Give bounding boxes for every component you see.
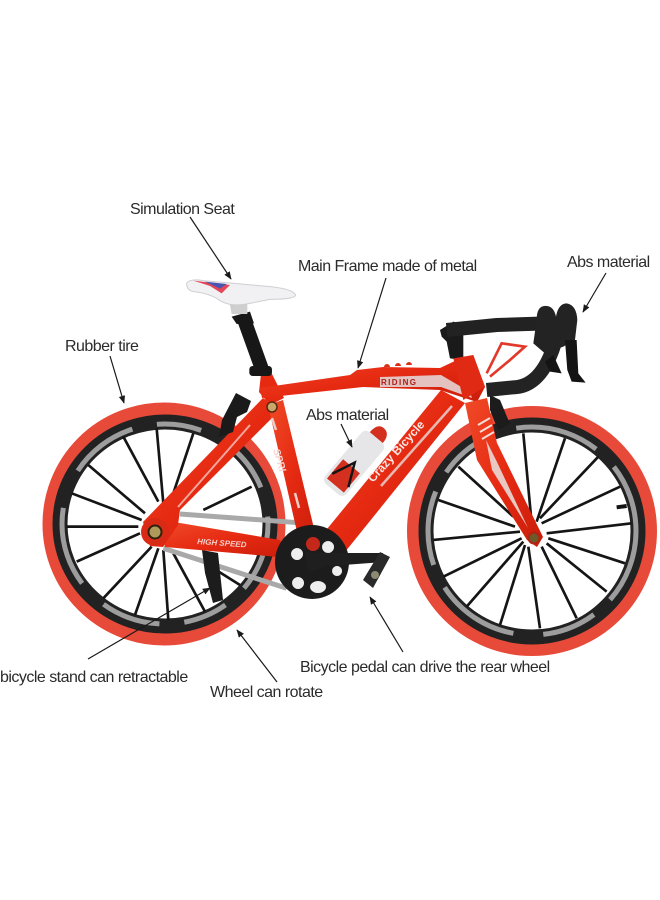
chain stay xyxy=(160,522,290,558)
label: Main Frame made of metal: Main Frame made of metal xyxy=(298,258,477,275)
rear axle xyxy=(148,526,162,538)
label: Wheel can rotate: Wheel can rotate xyxy=(210,684,323,701)
stem xyxy=(440,322,463,360)
arrow xyxy=(341,424,352,447)
bottle body xyxy=(321,428,387,498)
saddle xyxy=(187,280,296,314)
arrow xyxy=(358,278,386,368)
seat stay xyxy=(143,398,280,547)
cable bosses xyxy=(384,362,412,367)
seat tube stripes xyxy=(272,418,299,508)
rear tire xyxy=(49,409,279,639)
label: Abs material bottle xyxy=(306,407,389,447)
rear rim decals xyxy=(62,424,268,624)
seat tube xyxy=(268,400,318,545)
crank arm xyxy=(305,552,383,572)
front wheel xyxy=(413,412,651,650)
rear hub xyxy=(141,518,169,546)
chainring and crank xyxy=(275,525,390,599)
front rim decals xyxy=(428,427,636,635)
label: Simulation Seat: Simulation Seat xyxy=(130,201,235,218)
fork xyxy=(465,398,543,547)
chainring holes xyxy=(291,541,342,593)
head tube xyxy=(453,355,485,400)
saddle stripes xyxy=(193,281,230,293)
seat tube mark: SPRI xyxy=(270,448,288,473)
pedal xyxy=(363,552,390,588)
label: bicycle stand: bicycle stand can retractable xyxy=(0,669,188,686)
label: Abs material bottle: Abs material xyxy=(306,407,389,424)
label: Main Frame made of metal xyxy=(298,258,477,368)
bottle cage xyxy=(332,456,363,487)
bicycle stand and derailleur xyxy=(202,550,223,603)
down tube xyxy=(318,390,465,552)
high speed mark: HIGH SPEED xyxy=(197,537,247,549)
rear wheel xyxy=(49,409,279,639)
rear brake xyxy=(219,393,251,437)
bar drop xyxy=(487,337,557,390)
arrow xyxy=(370,597,403,652)
handlebar xyxy=(440,303,586,400)
brake hoods xyxy=(533,303,577,353)
chainring xyxy=(275,525,349,599)
seat clamp bolt xyxy=(267,402,277,412)
fork highlight xyxy=(486,440,528,528)
down tube stripes xyxy=(381,406,452,486)
label: Wheel can rotate xyxy=(210,630,323,701)
label: bicycle stand xyxy=(0,588,210,686)
arrow xyxy=(583,273,606,312)
label: Bicycle pedal: Bicycle pedal can drive the rear wheel xyxy=(300,659,550,676)
front spokes xyxy=(433,433,632,628)
arrow xyxy=(237,630,277,682)
top tube xyxy=(260,355,485,402)
seat tube top extension xyxy=(259,374,284,405)
front brake xyxy=(490,395,510,430)
chainring center xyxy=(306,537,320,551)
label: Bicycle pedal xyxy=(300,597,550,676)
front rim xyxy=(426,425,638,637)
pedal axle xyxy=(371,571,379,579)
top tube grey panel xyxy=(380,375,472,398)
rear spokes xyxy=(67,428,252,620)
label: Abs material handlebar xyxy=(567,254,650,312)
front tire xyxy=(413,412,651,650)
main frame xyxy=(141,355,485,558)
chain xyxy=(163,514,307,588)
arrow xyxy=(88,588,210,659)
arrow xyxy=(190,217,231,279)
label: Rubber tire xyxy=(65,338,139,403)
arrow xyxy=(110,356,124,403)
bottle label xyxy=(327,459,360,493)
fork stripes xyxy=(478,418,494,439)
bottle cap xyxy=(370,423,391,443)
top tube lettering: RIDING xyxy=(381,378,417,387)
water bottle xyxy=(321,419,394,498)
frame brand: Crazy Bicycle xyxy=(365,417,428,485)
label: Simulation Seat xyxy=(130,201,235,279)
seat post xyxy=(232,312,272,376)
brake levers xyxy=(545,340,586,383)
rear rim xyxy=(60,422,270,626)
label: Abs material handlebar: Abs material xyxy=(567,254,650,271)
red cable xyxy=(487,343,525,377)
label: Rubber tire: Rubber tire xyxy=(65,338,139,355)
fork axle xyxy=(528,532,540,544)
bar tops xyxy=(447,323,547,330)
seat stay highlight xyxy=(178,425,250,507)
